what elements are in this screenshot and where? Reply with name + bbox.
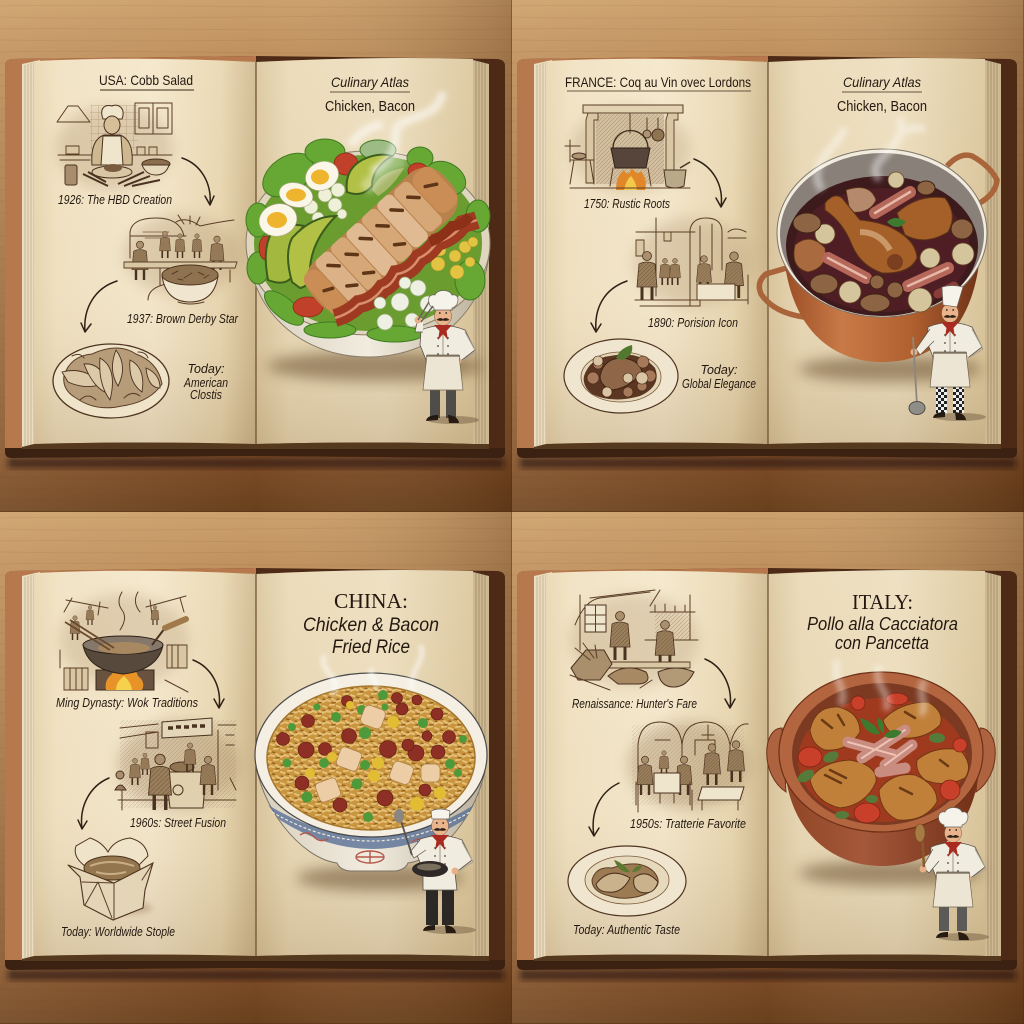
caption: 1926: 1926: The HBD Creation [58, 192, 172, 207]
caption: Ming Dynasty: Ming Dynasty: Wok Traditions [56, 695, 198, 710]
caption: today Global Elegance: Today: [700, 363, 738, 377]
icon: chef with wooden spoon [915, 808, 989, 941]
arrow: 1950s to today [589, 783, 619, 836]
steam [836, 660, 925, 715]
icon: plate sketch [53, 344, 169, 418]
caption: 1890: 1890: Porision Icon [648, 315, 738, 330]
icon: bowl sketch [162, 265, 218, 304]
icon: plated cacciatora [568, 846, 686, 916]
icon: plated coq au vin [564, 339, 678, 413]
icon: Brown Derby restaurant sketch [124, 215, 240, 300]
heading: Italy: Pollo alla Cacciatora [807, 614, 958, 634]
caption: 1750: 1750: Rustic Roots [584, 196, 670, 211]
caption: Renaissance: Renaissance: Hunter's Fare [572, 696, 697, 711]
heading: France: FRANCE: Coq au Vin ovec Lordons [565, 74, 751, 90]
caption: today Global Elegance [682, 363, 756, 391]
arrow: Renaissance to 1950s [705, 659, 735, 708]
heading: Culinary Atlas: Culinary Atlas [331, 74, 409, 90]
icon: hearth sketch [565, 105, 690, 192]
illustration: copper pot of coq au vin [759, 149, 997, 382]
icon: street stall sketch [115, 718, 238, 810]
panel: China fried rice book [5, 568, 505, 980]
caption: today American Clostis: American [183, 376, 228, 390]
heading: Culinary Atlas: Chicken, Bacon [325, 99, 415, 115]
heading: Culinary Atlas: Chicken, Bacon [837, 99, 927, 115]
heading: Culinary Atlas: Culinary Atlas [843, 74, 921, 90]
heading: China: Chicken & Bacon [303, 615, 439, 636]
arrow: 1750 to 1890 [694, 159, 726, 207]
panel: USA Cobb Salad book [5, 56, 505, 468]
heading: USA Cobb Salad: USA: Cobb Salad [99, 72, 193, 88]
arrow: 1937 to today [81, 281, 117, 332]
icon: takeout box [68, 838, 153, 920]
heading: Culinary Atlas [837, 74, 927, 115]
caption: today American Clostis: Clostis [190, 388, 222, 402]
steam [350, 92, 442, 190]
arrow: 1890 to today [591, 281, 627, 332]
arrow: Ming to 1960s [193, 660, 224, 708]
icon: Parisian bistro sketch [634, 218, 750, 306]
caption: 1950s: 1950s: Tratterie Favorite [630, 816, 746, 831]
caption: today: Today: Authentic Taste [573, 922, 680, 937]
heading: Culinary Atlas [325, 74, 415, 115]
caption: today American Clostis [183, 362, 228, 402]
caption: 1937: 1937: Brown Derby Star [127, 311, 239, 326]
icon: chef in kitchen sketch [56, 103, 172, 190]
icon: Renaissance kitchen sketch [570, 590, 698, 690]
illustration: terracotta dish [767, 672, 995, 886]
panel: Italy cacciatora book [517, 568, 1017, 980]
caption: today: Today: Worldwide Stople [61, 924, 175, 939]
heading: Italy: ITALY: [852, 590, 913, 614]
arrow: 1926 to 1937 [182, 158, 214, 205]
icon: chef with wok [394, 809, 476, 934]
arrow: 1960s to today [78, 778, 109, 829]
heading: Italy: con Pancetta [835, 633, 929, 653]
illustration: cobb salad bowl [246, 139, 490, 381]
heading: China [303, 589, 439, 658]
heading: China: Fried Rice [332, 637, 410, 658]
caption: today Global Elegance: Global Elegance [682, 377, 756, 391]
steam [323, 645, 422, 695]
icon: chef with ladle [909, 286, 986, 421]
heading: Italy [807, 590, 958, 653]
icon: chef with tongs [414, 290, 479, 424]
caption: today American Clostis: Today: [187, 362, 225, 376]
heading: China: CHINA: [334, 589, 408, 613]
icon: trattoria sketch [628, 721, 748, 812]
illustration: fried rice bowl [255, 673, 487, 891]
panel: France Coq au Vin book [517, 56, 1017, 468]
icon: wok sketch [60, 592, 188, 692]
steam [817, 118, 925, 190]
caption: 1960s: 1960s: Street Fusion [130, 815, 226, 830]
